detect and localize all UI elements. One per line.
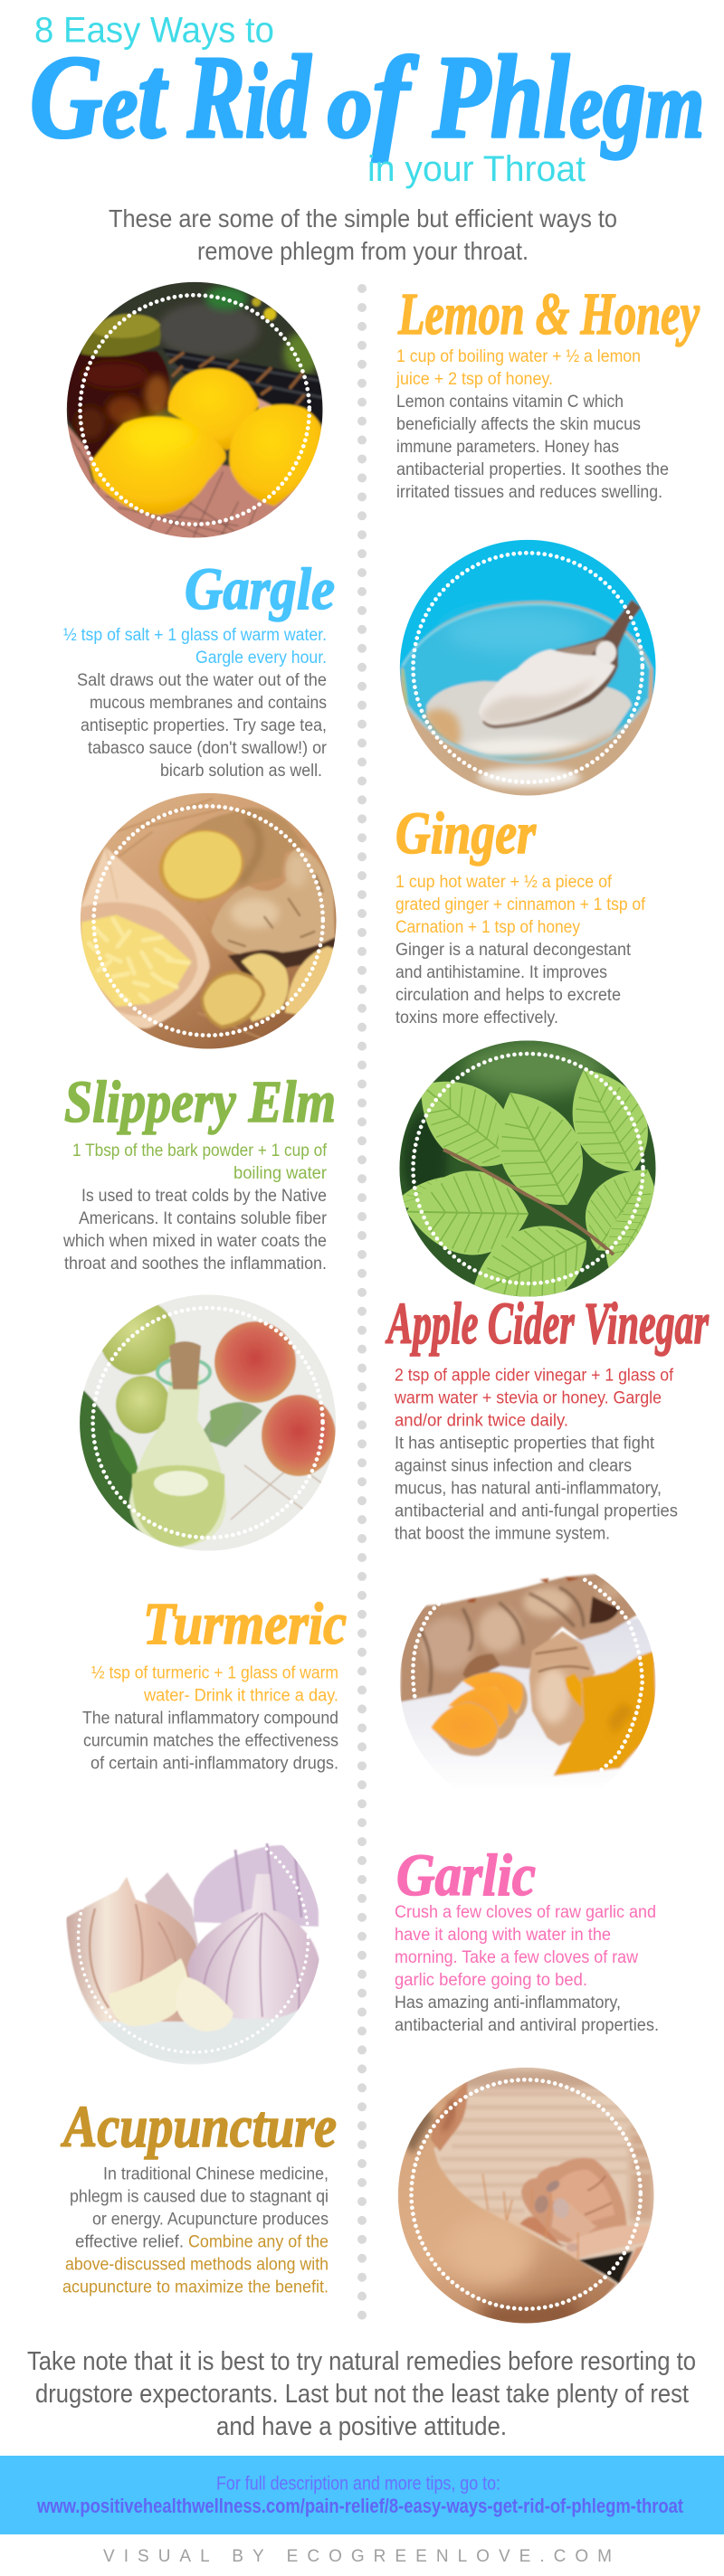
banner: lead-in: For full description and more tips, go to: [216,2473,500,2495]
recipe: juice + 2 tsp of honey. [395,370,553,389]
heading: Acupuncture [61,2094,337,2160]
recipe: boiling water [233,1164,328,1183]
recipe [62,2232,329,2297]
recipe [395,873,646,937]
description [62,1187,328,1274]
panel: gargle [63,536,659,801]
recipe [63,626,327,668]
recipe [394,1366,674,1431]
recipe: morning. Take a few cloves of raw [395,1948,638,1967]
description [395,1435,678,1543]
recipe: and/or drink twice daily. [395,1411,568,1431]
recipe [72,1141,328,1183]
description: curcumin matches the effectiveness [83,1731,338,1751]
recipe: warm water + stevia or honey. Gargle [394,1389,662,1407]
description: Salt draws out the water out of the [77,671,327,690]
panel: garlic [66,1842,657,2064]
description: which when mixed in water coats the [62,1232,327,1251]
description: irritated tissues and reduces swelling. [396,483,662,502]
description: circulation and helps to excrete [395,986,621,1005]
title: main heading: of [328,33,419,162]
description: mucus, has natural anti-inflammatory, [395,1480,662,1498]
description: bicarb solution as well. [160,762,322,781]
intro paragraph [109,204,617,265]
heading: Gargle [185,556,335,622]
description: antibacterial and anti-fungal properties [395,1501,678,1521]
description [77,671,328,781]
recipe: Carnation + 1 tsp of honey [395,918,580,937]
recipe: ½ tsp of salt + 1 glass of warm water. [63,626,327,645]
intro paragraph: These are some of the simple but efficient ways to [109,204,617,232]
description: throat and soothes the inflammation. [64,1255,327,1274]
recipe: 1 cup hot water + ½ a piece of [395,873,613,892]
panel: ginger [77,790,646,1052]
title: line three: in your Throat [367,149,586,189]
description: of certain anti-inflammatory drugs. [90,1755,338,1773]
description: In traditional Chinese medicine, [103,2164,329,2183]
photo: apples and vinegar bottle [77,1293,339,1556]
heading: Garlic [396,1842,536,1908]
recipe: ½ tsp of turmeric + 1 glass of warm [91,1664,338,1682]
recipe: 2 tsp of apple cider vinegar + 1 glass of [395,1366,674,1386]
recipe: acupuncture to maximize the benefit. [62,2278,329,2297]
panel: apple cider vinegar [77,1291,710,1556]
title: main heading: Phlegm [432,32,704,163]
description: effective relief. [75,2232,184,2251]
description: that boost the immune system. [395,1525,610,1543]
description: The natural inflammatory compound [82,1709,338,1728]
panel: slippery elm [63,1040,655,1297]
title: line one: 8 Easy Ways to [34,11,274,51]
recipe: 1 cup of boiling water + ½ a lemon [396,347,641,366]
panel: lemon and honey [63,279,700,541]
recipe [395,347,641,389]
photo: garlic bulbs and cloves [66,1842,319,2064]
description: Ginger is a natural decongestant [395,941,632,960]
description: antibacterial properties. It soothes the [396,460,669,479]
photo: acupuncture needles on shoulder [395,2064,657,2329]
description [396,393,669,502]
description: Is used to treat colds by the Native [81,1187,327,1206]
photo: ginger root and grated ginger [77,790,339,1052]
description: Lemon contains vitamin C which [396,393,624,412]
recipe: grated ginger + cinnamon + 1 tsp of [395,895,646,914]
recipe: water- Drink it thrice a day. [143,1686,338,1706]
heading: Turmeric [143,1591,347,1657]
recipe: Combine any of the [188,2232,329,2251]
description: or energy. Acupuncture produces [92,2210,329,2229]
description: toxins more effectively. [395,1009,558,1028]
footer credit: VISUAL BY ECOGREENLOVE.COM [103,2547,612,2566]
description [395,1994,659,2035]
description: and antihistamine. It improves [395,963,607,982]
photo: salt on spoon over glass bowl [396,536,659,801]
heading: Ginger [395,800,537,867]
description: phlegm is caused due to stagnant qi [70,2187,329,2206]
description [70,2164,329,2251]
intro paragraph: remove phlegm from your throat. [197,237,529,265]
title: main heading: Rid [186,32,312,163]
description [395,941,632,1028]
description: Americans. It contains soluble fiber [79,1209,328,1228]
title: main heading: Get [30,32,168,163]
description: immune parameters. Honey has [396,438,619,457]
description [82,1709,338,1773]
recipe: 1 Tbsp of the bark powder + 1 cup of [72,1141,328,1160]
recipe: have it along with water in the [395,1926,611,1945]
photo: lemons and honey jar [63,279,326,541]
panel: acupuncture [61,2064,657,2329]
photo: turmeric root and powder [399,1574,659,1793]
description: Has amazing anti-inflammatory, [395,1994,621,2012]
title block [30,11,704,189]
description: mucous membranes and contains [90,694,327,713]
description: antiseptic properties. Try sage tea, [81,716,327,735]
source banner [0,2456,724,2534]
recipe: Gargle every hour. [195,649,327,668]
recipe [91,1664,338,1706]
description: against sinus infection and clears [395,1456,632,1476]
dotted centre divider [357,289,367,2316]
heading: Slippery Elm [64,1069,336,1135]
photo: elm leaves [400,1040,655,1297]
description: antibacterial and antiviral properties. [395,2016,659,2035]
recipe: above-discussed methods along with [65,2255,329,2274]
title: main heading [30,32,704,163]
recipe: garlic before going to bed. [395,1971,587,1990]
closing paragraph: and have a positive attitude. [216,2412,507,2441]
closing paragraph [27,2347,696,2441]
panel: turmeric [82,1574,659,1793]
recipe: Crush a few cloves of raw garlic and [395,1903,656,1922]
recipe [395,1903,656,1990]
description: tabasco sauce (don't swallow!) or [88,739,328,758]
description: beneficially affects the skin mucus [396,415,641,434]
description: It has antiseptic properties that fight [395,1435,655,1453]
